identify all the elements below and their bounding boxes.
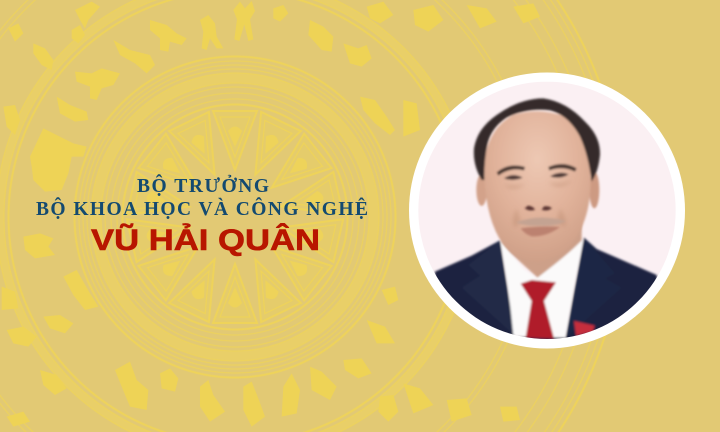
- title block: [36, 175, 368, 257]
- background: drum star: [127, 111, 343, 323]
- photo backdrop: [418, 82, 676, 276]
- portrait frame: [409, 72, 685, 348]
- portrait photo: [417, 82, 677, 342]
- heading line 1: BỘ TRƯỞNG: [137, 175, 269, 197]
- heading line 2: BỘ KHOA HỌC VÀ CÔNG NGHỆ: [36, 198, 368, 220]
- facial shadows: [509, 182, 566, 226]
- suit and shirt: [434, 224, 658, 339]
- background: drum figures: [2, 1, 540, 427]
- name: VŨ HẢI QUÂN: [91, 223, 320, 257]
- head: [474, 98, 600, 262]
- nose and mouth: [516, 206, 566, 236]
